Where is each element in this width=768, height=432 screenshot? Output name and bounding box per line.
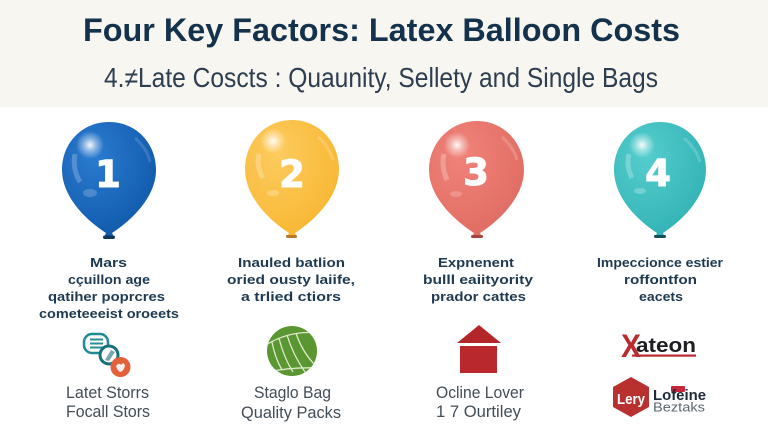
balloon 2: 2 [279,153,305,196]
logo: Xateon: ateon [636,334,696,357]
factor 3 label [436,384,524,421]
logo: Lery hexagon: Lofeine [653,387,706,404]
title: Four Key Factors: Latex Balloon Costs [83,12,680,48]
factor 1 description: cçuillon age [68,272,150,287]
balloon 3 [429,121,524,238]
factor 2 label: Quality Packs [241,404,341,422]
balloon 1 [62,122,156,239]
factor 4 description: Impeccionce estier [597,255,723,270]
factor 2 description: Inauled batlion [238,255,345,270]
logo: Xateon: X [621,328,642,364]
factor 1 description: cometeeeist oroeets [39,306,179,321]
header band [0,0,768,107]
factor 4 description: roffontfon [624,272,697,287]
icon: green bag ball [266,326,318,376]
balloon 2 [245,120,339,238]
factor 3 label: Ocline Lover [436,384,524,402]
factor 1 label: Focall Stors [66,403,150,421]
logo: Lery hexagon: Beztaks [653,400,706,414]
icon: stores chat bubbles [84,334,130,377]
factor 3 description: bulll eaiityority [423,272,534,287]
subtitle: 4.≠Late Coscts : Quaunity, Sellety and Single Bags [104,62,658,93]
factor 3 label: 1 7 Ourtiley [436,403,522,421]
factor 4 description: eacets [639,289,683,304]
factor 1 label [66,384,150,421]
factor 1 label: Latet Storrs [66,384,149,402]
balloon 3: 3 [463,151,489,194]
icon: red house [457,325,501,373]
factor 2 description: a trlied ctiors [241,289,341,304]
balloon 4 [614,122,706,238]
factor 3 description [423,255,534,304]
logo: Xateon [621,328,696,364]
factor 2 label: Staglo Bag [254,384,331,402]
factor 3 description: Expnenent [438,255,515,270]
logo: Lery hexagon: Lery [617,392,645,408]
balloon 1: 1 [95,153,121,196]
factor 3 description: prador cattes [431,289,526,304]
logo: Lery hexagon [613,377,706,417]
factor 1 description [39,255,179,321]
factor 2 description [227,255,355,304]
factor 4 description [597,255,723,304]
balloon 4: 4 [645,152,671,195]
factor 2 label [241,384,341,422]
factor 2 description: oried ousty laiife, [227,272,355,287]
factor 1 description: qatiher poprcres [48,289,165,304]
factor 1 description: Mars [90,255,127,270]
